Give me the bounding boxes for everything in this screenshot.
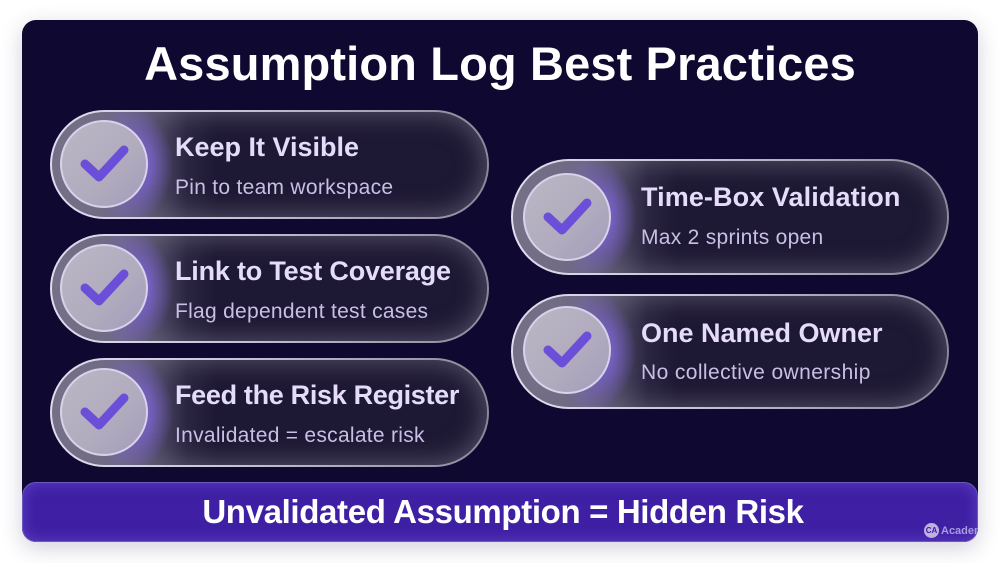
panel: Keep It Visible [50, 110, 489, 219]
heading: One Named Owner: One Named Owner [641, 318, 883, 348]
heading: Time-Box Validation: Time-Box Validation [641, 182, 900, 212]
heading: Link to Test Coverage: Link to Test Coverage [175, 256, 451, 286]
bottom banner [22, 482, 978, 542]
banner text: Unvalidated Assumption = Hidden Risk [202, 493, 804, 530]
icon: check circle [60, 244, 148, 332]
heading: Feed the Risk Register: Feed the Risk Register [175, 380, 459, 410]
icon: check circle [60, 368, 148, 456]
logo: CA Academy: CA [926, 526, 937, 535]
panel: Link to Test Coverage [50, 234, 489, 343]
panel: Feed the Risk Register [50, 358, 489, 467]
title: Assumption Log Best Practices [144, 37, 856, 90]
text: Max 2 sprints open: Max 2 sprints open [641, 226, 823, 249]
icon: check circle [523, 173, 611, 261]
text: Pin to team workspace: Pin to team workspace [175, 176, 393, 199]
panel: Time-Box Validation [511, 159, 949, 275]
icon: check circle [60, 120, 148, 208]
icon: check circle [523, 306, 611, 394]
logo: CA Academy [924, 523, 978, 538]
text: Flag dependent test cases: Flag dependent test cases [175, 300, 428, 323]
text: No collective ownership: No collective ownership [641, 361, 871, 384]
panel: One Named Owner [511, 294, 949, 409]
text: Invalidated = escalate risk: Invalidated = escalate risk [175, 424, 425, 447]
heading: Keep It Visible: Keep It Visible [175, 132, 359, 162]
